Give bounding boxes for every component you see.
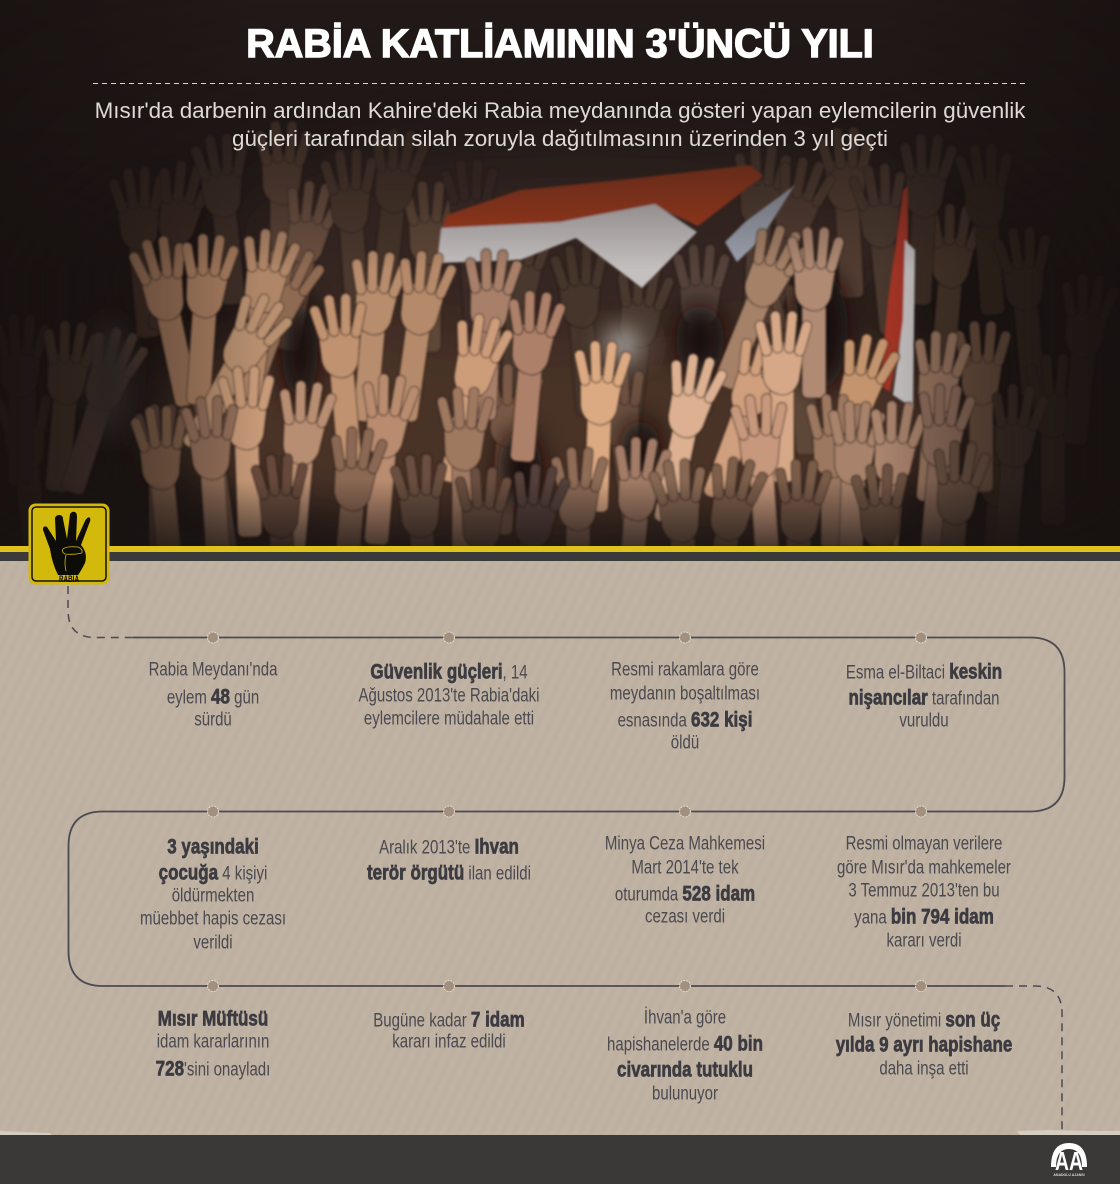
item: 9 new prisons: [836, 1008, 1012, 1080]
item: 9 new prisons: yılda 9 ayrı hapishane: [836, 1032, 1012, 1056]
item: terror organization: terör örgütü ilan edildi: [367, 860, 531, 884]
item: 632 dead: meydanın boşaltılması: [610, 684, 760, 704]
item: 1794 death sentences: kararı verdi: [886, 930, 962, 952]
item: 528 death sentences: cezası verdi: [645, 906, 725, 928]
item: Mufti approved 728: idam kararlarının: [157, 1032, 269, 1052]
flag: large Egyptian flag: [437, 165, 915, 408]
item: 3 year old child: [140, 834, 286, 954]
item: 40 thousand detained: bulunuyor: [652, 1084, 718, 1104]
item: 3 year old child: verildi: [193, 932, 233, 954]
item: 48 days: Rabia Meydanı'nda: [149, 660, 277, 680]
divider band: [0, 546, 1120, 561]
paper texture panel: [0, 561, 1120, 1135]
item: 1794 death sentences: 3 Temmuz 2013'ten bu: [848, 880, 1000, 902]
badge: Rabia four-finger hand: RABIA: [59, 574, 79, 584]
item: 48 days: eylem 48 gün: [167, 684, 259, 708]
near lit hands: [125, 217, 993, 638]
item: snipers: Esma el-Biltaci keskin: [846, 660, 1002, 684]
item: 48 days: [149, 660, 278, 730]
item: 1794 death sentences: göre Mısır'da mahkemeler: [837, 858, 1011, 878]
item: Mufti approved 728: Mısır Müftüsü: [158, 1006, 268, 1030]
item: security forces: [358, 660, 539, 730]
item: 632 dead: Resmi rakamlara göre: [611, 660, 759, 680]
item: 528 death sentences: Minya Ceza Mahkemesi: [605, 834, 765, 854]
item: 528 death sentences: oturumda 528 idam: [615, 882, 755, 906]
item: terror organization: Aralık 2013'te Ihvan: [379, 834, 519, 858]
item: terror organization: [366, 834, 531, 884]
badge: Rabia four-finger hand: [28, 504, 110, 584]
subtitle: güçleri tarafından silah zoruyla dağıtılmasının üzerinden 3 yıl geçti: [232, 126, 888, 151]
item: 528 death sentences: Mart 2014'te tek: [631, 858, 739, 878]
item: 40 thousand detained: [607, 1006, 763, 1104]
item: security forces: Ağustos 2013'te Rabia'daki: [359, 686, 539, 706]
item: 3 year old child: çocuğa 4 kişiyi: [159, 860, 267, 884]
item: 7 executions: Bugüne kadar 7 idam: [373, 1008, 525, 1032]
item: 632 dead: esnasında 632 kişi: [618, 708, 752, 732]
item: 48 days: sürdü: [194, 710, 232, 730]
item: 1794 death sentences: [837, 834, 1011, 952]
item: Mufti approved 728: [156, 1006, 270, 1080]
item: 1794 death sentences: Resmi olmayan verilere: [846, 834, 1002, 854]
torn paper edge: [0, 1130, 1120, 1135]
item: 3 year old child: 3 yaşındaki: [167, 834, 259, 858]
item: snipers: vuruldu: [899, 710, 949, 732]
item: security forces: eylemcilere müdahale etti: [364, 708, 534, 730]
item: snipers: [846, 660, 1002, 732]
item: 3 year old child: öldürmekten: [172, 886, 254, 906]
footer bar: [0, 1135, 1120, 1184]
item: Mufti approved 728: 728'sini onayladı: [156, 1056, 270, 1080]
item: 7 executions: kararı infaz edildi: [392, 1032, 506, 1052]
item: 40 thousand detained: civarında tutuklu: [617, 1058, 753, 1082]
item: 632 dead: öldü: [671, 732, 699, 754]
item: 528 death sentences: [605, 834, 765, 928]
item: snipers: nişancılar tarafından: [848, 686, 1000, 710]
item: 632 dead: [610, 660, 760, 754]
item: 3 year old child: müebbet hapis cezası: [140, 908, 286, 930]
title: RABİA KATLİAMININ 3'ÜNCÜ YILI: [246, 22, 874, 66]
subtitle: Mısır'da darbenin ardından Kahire'deki Rabia meydanında gösteri yapan eylemcilerin güvenlik: [95, 98, 1025, 123]
photo: crowd of raised hands: [0, 0, 1120, 546]
item: 1794 death sentences: yana bin 794 idam: [854, 904, 994, 928]
icon: Anadolu Agency logo: ANADOLU AJANSI: [1053, 1173, 1085, 1177]
item: 40 thousand detained: İhvan'a göre: [644, 1008, 726, 1028]
subtitle: [95, 98, 1026, 151]
dark gaps, shirts between hands: [92, 270, 848, 510]
item: 40 thousand detained: hapishanelerde 40 bin: [607, 1032, 763, 1056]
far dim hands: [0, 121, 1120, 596]
item: 9 new prisons: daha inşa etti: [879, 1058, 969, 1080]
item: 7 executions: [373, 1008, 525, 1052]
item: 9 new prisons: Mısır yönetimi son üç: [848, 1008, 1000, 1032]
item: security forces: Güvenlik güçleri, 14: [370, 660, 528, 684]
